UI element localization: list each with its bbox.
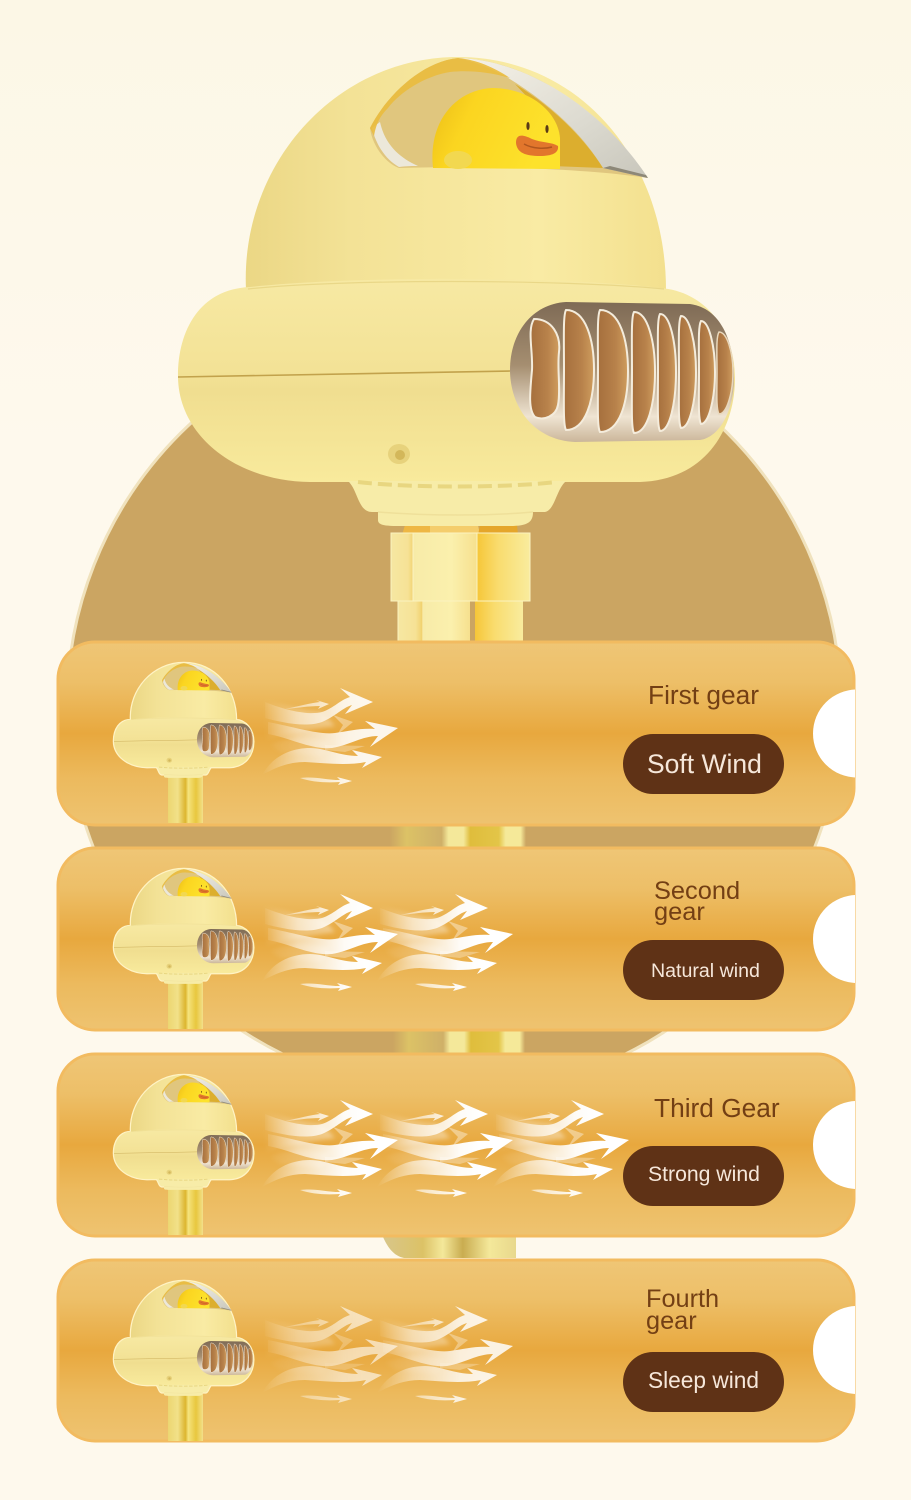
icon: small fan: [114, 1075, 253, 1235]
label: Fourth gear: gear: [646, 1307, 697, 1335]
badge: Sleep wind: Sleep wind: [648, 1367, 759, 1393]
wind arrows: one set: [262, 688, 398, 785]
pole strip between cards two and three: [393, 1031, 525, 1054]
icon: small fan: [114, 869, 253, 1029]
icon: small fan: [114, 1281, 253, 1441]
pole strip between cards one and two: [390, 826, 526, 848]
badge: Natural wind: [623, 940, 784, 1000]
panel: first gear: [58, 642, 901, 825]
icon: small fan: [114, 663, 253, 823]
badge: Sleep wind: [623, 1352, 784, 1412]
label: Third Gear: Third Gear: [654, 1093, 780, 1123]
wind arrows: three sets: [262, 1100, 629, 1197]
label: Second gear: gear: [654, 898, 705, 926]
badge: Soft Wind: Soft Wind: [647, 749, 762, 779]
badge: Strong wind: Strong wind: [648, 1163, 760, 1186]
wind arrows: two faint sets: [262, 1306, 513, 1403]
label: Fourth gear: Fourth: [646, 1285, 719, 1313]
badge: Natural wind: Natural wind: [651, 960, 760, 982]
badge: Soft Wind: [623, 734, 784, 794]
panel: second gear: [58, 848, 901, 1030]
label: Second gear: Second: [654, 877, 740, 905]
fan pole: [391, 525, 530, 650]
wind arrows: two sets: [262, 894, 513, 991]
panel: third gear: [58, 1054, 901, 1236]
panel: fourth gear: [58, 1260, 901, 1441]
large gold backdrop circle: [67, 320, 841, 1094]
fan head with duck: [178, 57, 735, 526]
label: First gear: First gear: [648, 680, 759, 710]
illustration: large duck fan: [178, 57, 735, 650]
badge: Strong wind: [623, 1146, 784, 1206]
pole strip between cards three and four: [383, 1237, 516, 1258]
